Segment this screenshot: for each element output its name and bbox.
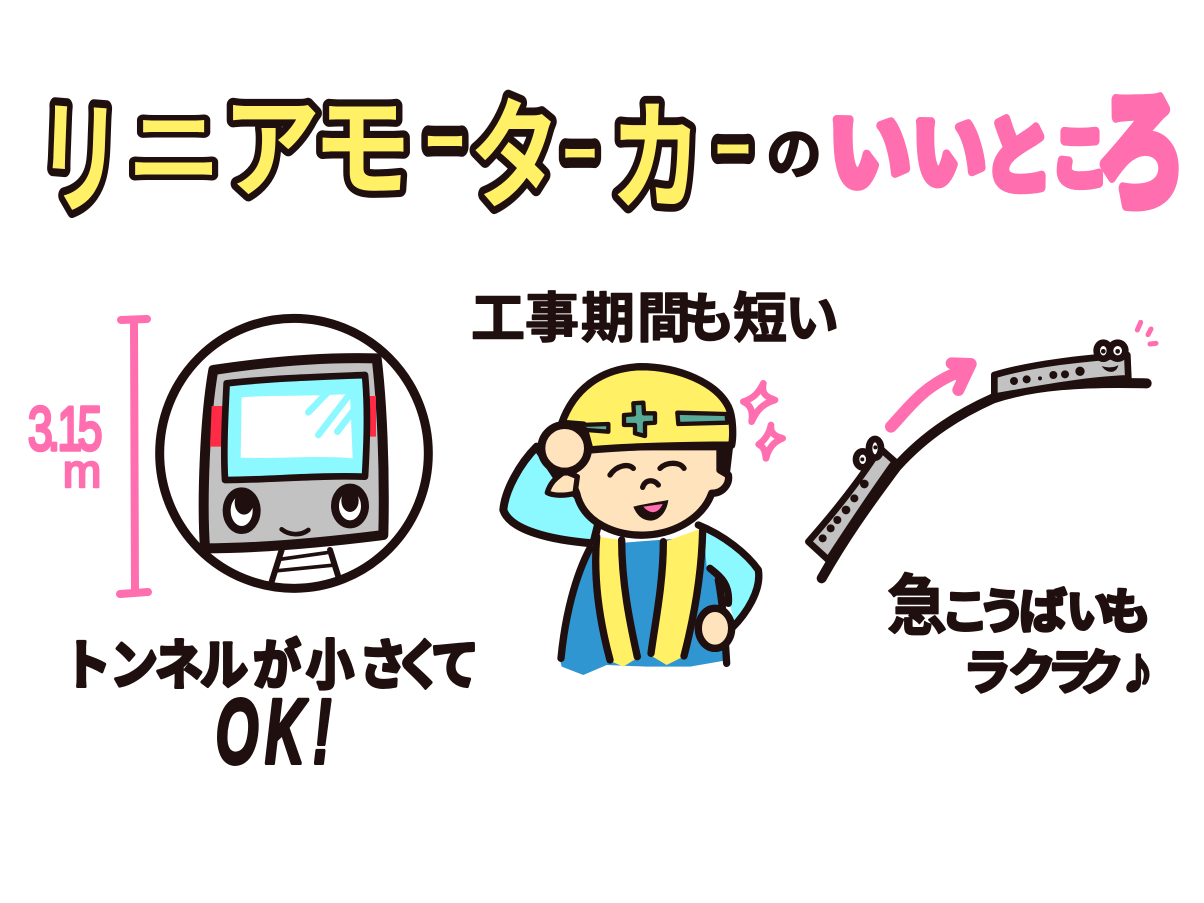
title: と: [984, 111, 1052, 205]
title: カ: [610, 91, 702, 226]
arrow: [891, 363, 971, 427]
title: ー: [562, 125, 598, 188]
title: こ: [1052, 120, 1108, 197]
track under train: [272, 550, 338, 582]
caption: small tunnel: OK!: [216, 681, 331, 784]
upper train: [994, 343, 1128, 397]
train in tunnel: [160, 318, 428, 588]
caption: small tunnel: [63, 635, 479, 784]
title: タ: [470, 91, 560, 224]
caption: steep slope: 急: [887, 570, 947, 644]
raised arm: [503, 447, 600, 543]
lower train: [808, 439, 895, 560]
caption: short construction: 工事期間も短い: [471, 289, 839, 349]
worker character: [503, 367, 783, 675]
title: ろ: [1096, 81, 1186, 226]
head: [547, 445, 733, 535]
title: ー: [714, 117, 752, 185]
title: ア: [222, 90, 320, 212]
title: い: [828, 104, 911, 204]
title: い: [912, 106, 986, 200]
tunnel circle: [160, 318, 428, 588]
caption: steep slope: [887, 570, 1154, 706]
train front: [204, 358, 384, 548]
helmet: [562, 367, 733, 450]
title: の: [766, 123, 822, 186]
sparkles: [743, 383, 783, 458]
height label 3.15 m: [28, 395, 102, 497]
caption: steep slope: ラクラク: [963, 647, 1124, 700]
caption: steep slope: ♪: [1122, 632, 1154, 706]
track curve: [822, 383, 1147, 578]
sparkle ticks: [1137, 322, 1156, 344]
caption: steep slope: こうばいも: [941, 586, 1151, 639]
height label 3.15 m: 3.15: [28, 395, 102, 464]
slope with trains: [808, 322, 1156, 578]
height label 3.15 m: m: [63, 445, 101, 497]
title: [34, 81, 1186, 233]
hands: [541, 425, 732, 648]
caption: small tunnel: トンネルが小さくて: [63, 635, 479, 696]
title: モ: [312, 89, 412, 211]
title: リ: [34, 87, 124, 233]
title: ニ: [127, 102, 222, 197]
title: ー: [424, 106, 466, 181]
pink height bar: [120, 319, 148, 594]
body and vest: [560, 525, 759, 675]
